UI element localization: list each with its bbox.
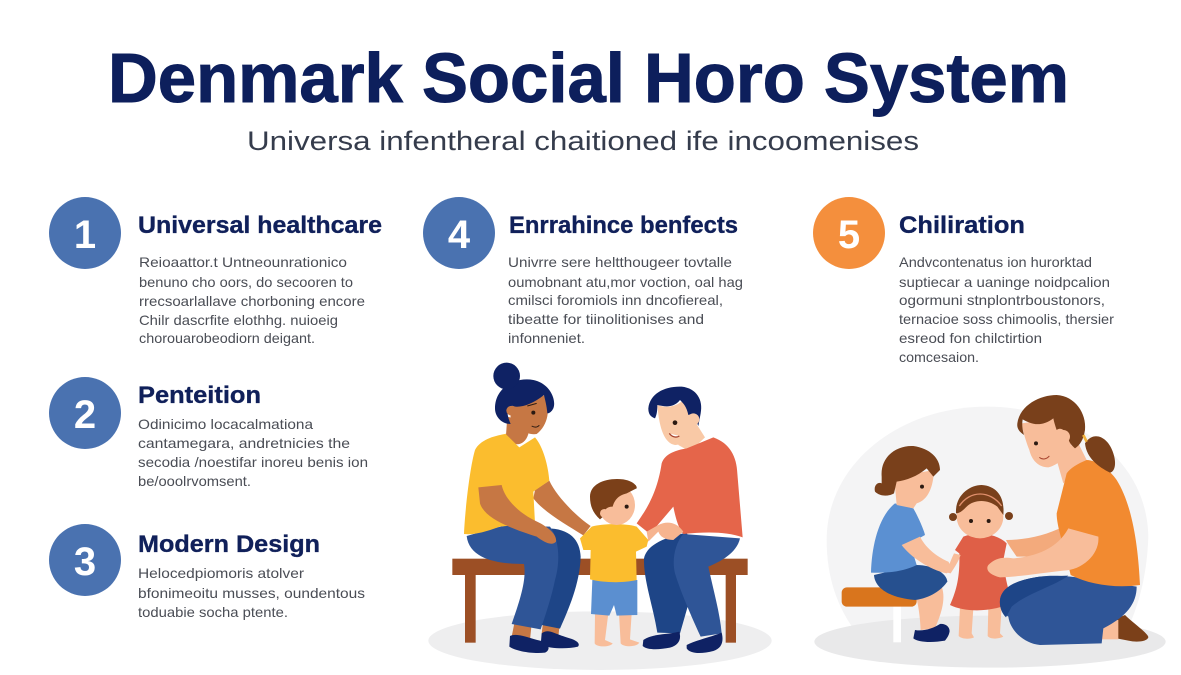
body text 5: ogormuni stnplontrboustonors, — [899, 292, 1105, 308]
heading 1: Universal healthcare — [138, 212, 382, 239]
body text 5: suptiecar a uaninge noidpcalion — [899, 274, 1110, 290]
subtitle: Universa infentheral chaitioned ife incoomenises — [247, 126, 919, 156]
panel: item 5 chiliration — [813, 197, 1114, 365]
illustration: caregiver with two children — [814, 395, 1166, 668]
body text 4: oumobnant atu,mor voction, oal hag — [508, 274, 743, 290]
body text 5: Andvcontenatus ion hurorktad — [899, 254, 1092, 270]
body text 3: toduabie socha ptente. — [138, 604, 288, 620]
illustration: family on a bench — [428, 363, 772, 670]
body text 4: infonneniet. — [508, 330, 585, 346]
heading 3: Modern Design — [138, 531, 320, 558]
child — [580, 479, 648, 646]
body text 2 — [138, 416, 368, 489]
number badge 2: 2 — [74, 393, 96, 437]
number badge 4 — [423, 197, 495, 269]
number badge 5: 5 — [838, 213, 860, 257]
heading 5: Chiliration — [899, 212, 1025, 239]
body text 2: be/ooolrvomsent. — [138, 473, 251, 489]
body text 5: comcesaion. — [899, 349, 979, 365]
number badge 1 — [49, 197, 121, 269]
man — [637, 387, 743, 653]
panel: item 1 universal healthcare — [49, 197, 382, 346]
body text 3: Helocedpiomoris atolver — [138, 565, 304, 581]
panel: item 3 modern design — [49, 524, 365, 620]
stool — [842, 587, 917, 642]
body text 1: rrecsoarlallave chorboning encore — [139, 293, 365, 309]
body text 1: chorouarobeodiorn deigant. — [139, 330, 315, 346]
woman — [464, 363, 591, 653]
standing toddler — [947, 485, 1013, 639]
caregiver — [987, 395, 1148, 645]
body text 4: tibeatte for tiinolitionises and — [508, 311, 704, 327]
bench — [452, 559, 748, 643]
body text 4: Univrre sere heltthougeer tovtalle — [508, 254, 732, 270]
title: Denmark Social Horo System — [108, 39, 1069, 117]
number badge 4: 4 — [448, 213, 471, 257]
number badge 2 — [49, 377, 121, 449]
body text 1: Reioaattor.t Untneounrationico — [139, 254, 347, 270]
body text 2: cantamegara, andretnicies the — [138, 435, 350, 451]
body text 5 — [899, 254, 1114, 365]
body text 3 — [138, 565, 365, 620]
body text 1: benuno cho oors, do secooren to — [139, 274, 353, 290]
panel: item 4 enrahince benefits — [423, 197, 743, 346]
ground shadow — [428, 611, 772, 670]
body text 1: Chilr dascrfite elothhg. nuioeig — [139, 312, 338, 328]
heading 4: Enrrahince benfects — [509, 212, 738, 239]
ground shadow — [814, 616, 1166, 668]
body text 3: bfonimeoitu musses, oundentous — [138, 585, 365, 601]
number badge 5 — [813, 197, 885, 269]
body text 4 — [508, 254, 743, 346]
body text 2: secodia /noestifar inoreu benis ion — [138, 454, 368, 470]
body text 2: Odinicimo locacalmationa — [138, 416, 313, 432]
number badge 1: 1 — [74, 213, 96, 257]
body text 4: cmilsci foromiols inn dncofiereal, — [508, 292, 723, 308]
heading 2: Penteition — [138, 382, 261, 409]
panel: item 2 penteition — [49, 377, 368, 489]
body text 1 — [139, 254, 365, 346]
sitting child — [871, 446, 950, 642]
body text 5: esreod fon chilctirtion — [899, 330, 1042, 346]
background blob — [827, 407, 1148, 643]
body text 5: ternacioe soss chimoolis, thersier — [899, 311, 1114, 327]
number badge 3: 3 — [74, 540, 96, 584]
number badge 3 — [49, 524, 121, 596]
